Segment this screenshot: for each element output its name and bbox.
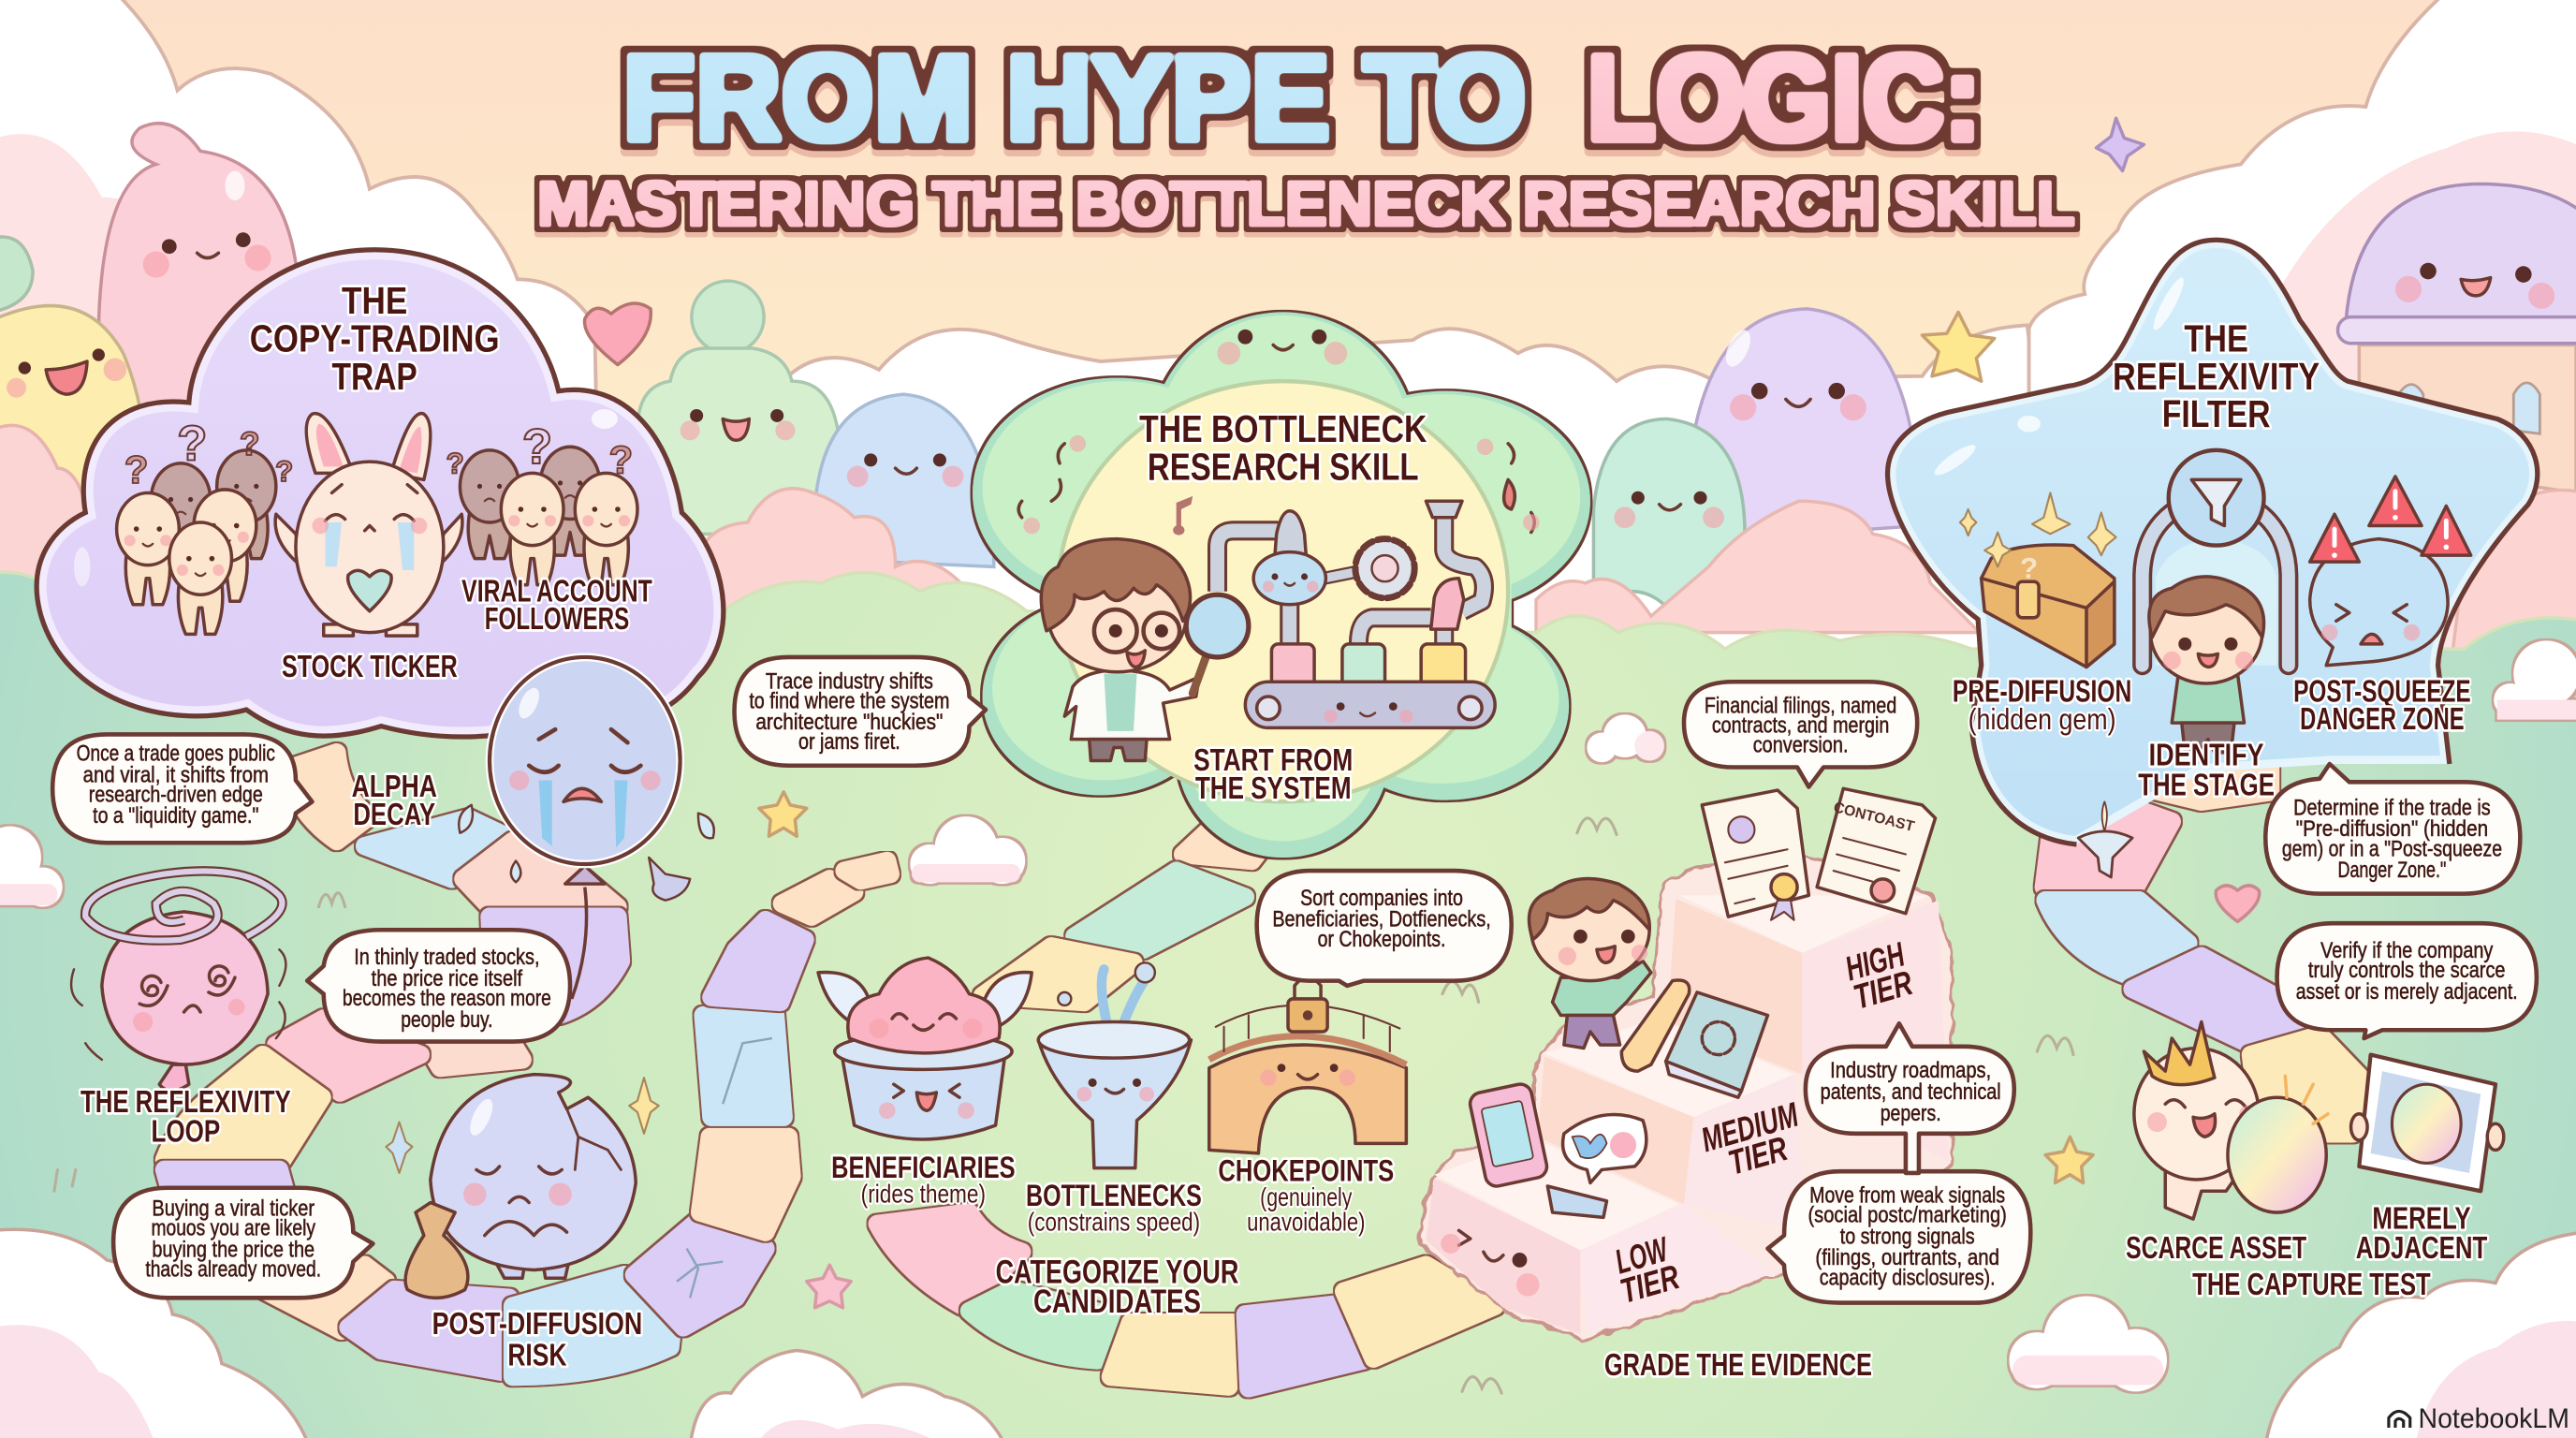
sparkles near egg [386,1078,659,1173]
label beneficiaries: (rides theme) [861,1180,986,1209]
heading: THE [342,279,407,322]
beneficiaries icon [818,958,1032,1139]
label start: THE SYSTEM [1195,771,1352,806]
callout: thinly traded [307,930,570,1042]
pink left bush [0,425,98,592]
magnifier [1186,594,1249,694]
callout: verify: Verify if the company [2320,939,2493,963]
callout: sort companies [1257,871,1512,986]
callout: verify: truly controls the scarce [2308,959,2506,983]
yellow star right [2045,1137,2093,1182]
iridescent orb [2228,1076,2328,1212]
label beneficiaries: BENEFICIARIES [831,1151,1016,1184]
heading: RESEARCH SKILL [1148,445,1419,488]
label bottlenecks: (constrains speed) [1028,1207,1200,1236]
label pre-diffusion: PRE-DIFFUSION [1953,674,2131,709]
machine [1218,501,1495,727]
confused followers left: ? [275,454,293,488]
documents [1702,788,1936,920]
heading: TRAP [332,355,417,398]
label capture test: THE CAPTURE TEST [2192,1268,2431,1302]
callout: financial filings: conversion. [1753,734,1848,758]
tier labels: TIER [1850,963,1917,1017]
grass tufts [54,818,2073,1393]
callout: financial filings: contracts, and mergin [1712,714,1889,739]
sad bunny stock ticker [275,414,462,636]
pink star bottom [807,1265,851,1308]
side petal faces [1018,435,1540,534]
dome tower [2338,184,2576,492]
callout: financial filings: Financial filings, named [1705,695,1896,719]
robot [1253,511,1325,605]
filter arch [2143,450,2289,666]
label merely adjacent [2356,1202,2487,1266]
left edge cloud [0,827,63,907]
panel: copy-trading trap [37,250,724,737]
confused followers left: ? [177,416,207,471]
heading: FILTER [2162,392,2271,435]
icon: purple star [2097,118,2144,171]
label reflexivity loop: THE REFLEXIVITY [80,1085,291,1120]
pink cloud bushes [698,489,2576,690]
top petal face [1218,330,1347,365]
title [622,29,1982,166]
gear [1355,539,1414,598]
balloon alpha decay [490,657,681,999]
heading [2113,317,2320,435]
chokepoints bridge icon [1209,977,1406,1153]
mid white cloud band [723,325,2070,690]
label pre-diffusion [1953,674,2131,736]
callout: move from weak signals: (filings, ourtrants, and [1815,1246,1999,1270]
label post-diffusion risk [432,1307,642,1372]
stair top faces [1679,895,1928,953]
label post-diffusion risk: RISK [507,1338,567,1372]
boy climbing [1529,878,1651,1049]
callout: industry roadmaps: pepers. [1881,1102,1941,1126]
callout: thinly traded: the price rice itself [372,967,522,991]
title pink part: LOGIC: [1587,29,1982,166]
callout: thinly traded: In thinly traded stocks, [354,946,540,970]
money bag [405,1203,468,1298]
label categorize: CATEGORIZE YOUR [996,1255,1238,1291]
label categorize [996,1255,1238,1320]
callout: trace industry: to find where the system [749,689,949,713]
tear drops and puff [459,805,714,901]
callout: verify: asset or is merely adjacent. [2296,980,2518,1005]
label viral followers [461,574,652,637]
treasure chest [1982,545,2115,667]
callout: buying a viral ticker: Buying a viral ticker [152,1197,315,1222]
small cloud near flower [1587,714,1664,762]
callout: once a trade: to a "liquidity game." [93,804,258,829]
callout: industry roadmaps: patents, and technical [1821,1080,2001,1105]
callout: once a trade: research-driven edge [89,783,263,807]
confused followers left [117,416,293,634]
callout: move from weak signals: to strong signals [1840,1225,1975,1249]
swirl balloon reflexivity loop [71,871,285,1091]
evidence staircase [1421,788,1952,1339]
flower petals [973,312,1590,858]
callout: determine: gem) or in a "Post-squeeze [2282,837,2502,861]
green ground [0,572,2576,1438]
callout: determine: Determine if the trade is [2293,796,2491,820]
label alpha decay: DECAY [353,798,435,832]
label start [1193,743,1353,806]
tile cracks [677,1038,772,1298]
label chokepoints [1218,1154,1394,1236]
inner yellow circle [1058,381,1508,801]
label viral followers: FOLLOWERS [485,602,629,637]
confused followers right: ? [522,419,552,475]
pink heart right [2216,886,2260,921]
heading [1139,407,1427,488]
callout: trace industry: architecture "huckies" [755,711,943,735]
cans [1271,644,1466,687]
label bottlenecks: BOTTLENECKS [1026,1179,1202,1212]
marshmallow blocks [1421,858,1952,1339]
tier labels [1608,934,1918,1311]
callout: sort companies: or Chokepoints. [1318,928,1445,952]
label reflexivity loop [80,1085,291,1150]
confused followers right: ? [609,437,633,481]
title blue part: FROM HYPE TO [622,29,1526,166]
label scarce asset: SCARCE ASSET [2126,1231,2306,1266]
pink piston [1431,579,1464,629]
callout: financial filings [1684,682,1917,787]
flower highlight layer [983,315,1580,841]
icon: yellow star [1922,312,1995,381]
right edge cloud [2494,640,2576,720]
callout: sort companies: Beneficiaries, Dotfienecks, [1272,908,1491,932]
confused followers right: ? [446,446,464,479]
label alpha decay: ALPHA [352,770,437,804]
callout: trace industry: or jams firet. [798,730,900,755]
label merely adjacent: MERELY [2372,1202,2471,1237]
callout: move from weak signals: (social postc/marketing) [1808,1204,2007,1228]
callout: move from weak signals [1767,1171,2030,1303]
purple blob [1686,309,1919,542]
blue blob [814,394,994,566]
label alpha decay [352,770,437,832]
label merely adjacent: ADJACENT [2356,1231,2487,1266]
cracked egg [431,1075,636,1278]
bottlenecks funnel icon [1038,962,1191,1168]
callout: buying a viral ticker: buying the price the [152,1238,315,1262]
confused followers left: ? [124,448,149,492]
bottom centre cloud [690,1350,1005,1438]
sparkles [1960,492,2116,566]
label categorize: CANDIDATES [1033,1284,1201,1320]
label beneficiaries [831,1151,1016,1209]
mint blob [1593,418,1745,608]
label post-diffusion risk: POST-DIFFUSION [432,1307,642,1342]
upper left cloud [0,0,600,592]
confused followers left: ? [240,426,259,462]
callout: verify [2277,923,2537,1038]
heading: THE [2184,317,2248,360]
callout: thinly traded: becomes the reason more [343,987,551,1011]
tier labels: TIER [1724,1129,1792,1182]
music note [1173,496,1193,536]
callout: trace industry [735,657,986,766]
panel: bottleneck research skill [973,312,1590,858]
documents: CONTOAST [1832,800,1916,835]
label post-squeeze [2293,674,2471,737]
small cloud middle [910,816,1025,884]
callout: determine [2265,764,2520,894]
scroll and book [1621,980,1767,1097]
king character [2134,1022,2259,1219]
callout: trace industry: Trace industry shifts [766,669,933,694]
label viral followers: VIRAL ACCOUNT [461,574,652,609]
label reflexivity loop: LOOP [151,1115,220,1150]
bottom right cloud [2265,1232,2576,1438]
heading: REFLEXIVITY [2113,355,2320,398]
subtitle: MASTERING THE BOTTLENECK RESEARCH SKILL [537,169,2075,239]
mint peeking blob [0,237,33,312]
conveyor [1245,682,1495,727]
small scattered icons [54,792,2260,1393]
yellow star left [759,792,807,836]
callout: industry roadmaps: Industry roadmaps, [1830,1059,1991,1083]
pastel blob characters [0,124,2576,608]
tier labels: TIER [1616,1257,1684,1311]
label stock ticker: STOCK TICKER [282,650,458,684]
bottom left cloud [0,1229,309,1438]
label chokepoints: unavoidable) [1247,1207,1365,1236]
merely adjacent frame [2351,1055,2504,1191]
icon: pink heart [585,303,651,365]
pink blob [98,124,304,492]
heading [250,279,500,398]
label start: START FROM [1193,743,1353,778]
tier labels: HIGH [1841,934,1910,988]
bottom and side clouds [0,640,2576,1438]
NotebookLM logo: NotebookLM [2419,1403,2569,1434]
sad blue bubble with warnings [2310,477,2471,666]
callout: once a trade [52,734,312,843]
label identify the stage: THE STAGE [2138,768,2275,802]
upper right cloud [2029,0,2576,723]
callout: industry roadmaps [1806,1023,2014,1173]
capture test illustrations [2134,1022,2504,1219]
label chokepoints: CHOKEPOINTS [1218,1154,1394,1188]
callout: once a trade: Once a trade goes public [77,741,275,766]
heading: THE BOTTLENECK [1139,407,1427,450]
yellow blob [0,306,148,492]
callout: determine: "Pre-diffusion" (hidden [2296,817,2488,842]
callout: sort companies: Sort companies into [1300,887,1463,911]
board game path [165,723,2359,1388]
label identify the stage: IDENTIFY [2149,739,2264,773]
phone and social icons [1468,1082,1647,1217]
callout: buying a viral ticker: thacls already moved. [145,1258,321,1283]
callout: buying a viral ticker [113,1188,373,1298]
confused followers right [446,419,637,585]
callout: once a trade: and viral, it shifts from [83,763,269,787]
label chokepoints: (genuinely [1260,1182,1352,1211]
step face [1441,1230,1540,1297]
scientist [1041,496,1249,760]
callout: buying a viral ticker: mouos you are likely [151,1217,315,1241]
label identify the stage [2138,739,2275,802]
label post-squeeze: DANGER ZONE [2300,702,2465,737]
callout: move from weak signals: Move from weak signals [1809,1184,2005,1209]
small cloud bottom [2009,1297,2167,1391]
callout: determine: Danger Zone." [2338,858,2446,883]
label pre-diffusion: (hidden gem) [1969,702,2116,736]
label grade the evidence: GRADE THE EVIDENCE [1604,1348,1872,1383]
callout: move from weak signals: capacity disclosures). [1820,1266,1996,1290]
boy walking through gate [2149,577,2264,753]
label bottlenecks [1026,1179,1202,1236]
green bumpy blob [637,281,840,534]
icon: funnel on tile [2078,801,2132,877]
label post-squeeze: POST-SQUEEZE [2293,674,2471,709]
decorative sky icons [585,118,2144,381]
treasure chest: ? [2020,551,2038,585]
callout: thinly traded: people buy. [401,1008,493,1033]
tier labels: MEDIUM [1697,1095,1803,1159]
heading: COPY-TRADING [250,317,500,360]
panel: reflexivity filter [1888,240,2538,844]
tier labels: LOW [1611,1229,1674,1282]
